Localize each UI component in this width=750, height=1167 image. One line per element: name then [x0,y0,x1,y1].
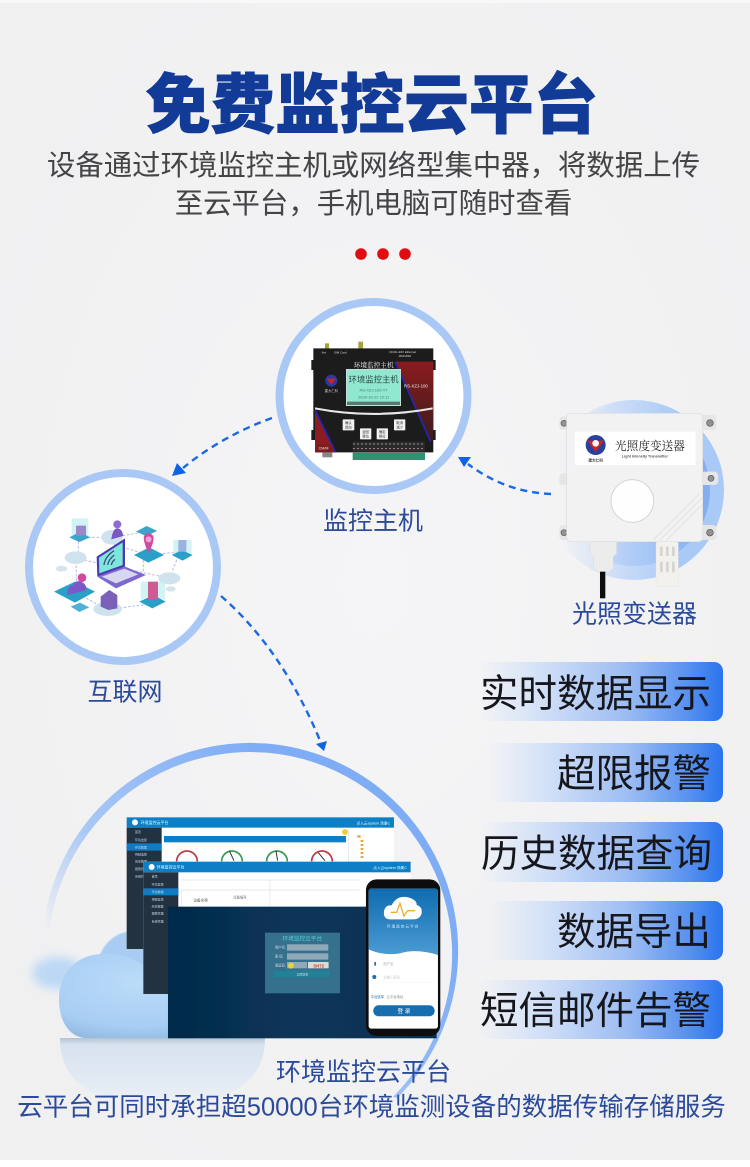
screen: data table: 系统管理 [152,918,164,923]
icon: monitoring host device: 确定 [379,429,386,434]
arrow: internet to cloud platform [221,596,327,751]
panel: internet [29,473,217,661]
panel: cloud platform illustration [32,817,440,1105]
screen: gauge dashboard: 环境监控 [135,837,147,842]
login dialog: 验证码: [275,963,286,968]
screen: login page [168,907,437,1038]
arrow: monitoring host to internet [172,418,272,476]
icon: monitoring host device [311,342,436,460]
screen: data table: 报警管理 [152,911,164,916]
subtitle text: 设备通过环境监控主机或网络型集中器，将数据上传 [47,150,700,182]
icon: light sensor device [559,413,718,598]
icon: smartphone: 云平台地址 [387,994,404,999]
icon: monitoring host device: 减少 [396,425,404,430]
screen: gauge dashboard: 系统管理 [135,874,147,879]
subtitle text: 至云平台，手机电脑可随时查看 [175,188,572,220]
feature button: real-time data display: 实时数据显示 [480,673,711,716]
cloud platform ring [43,743,458,1098]
feature button: data export: 数据导出 [557,911,711,954]
screen: data table: 点入云system 场景C [373,865,407,870]
screen: data table: 历史数据 [152,903,164,908]
login dialog: SH72 [313,963,325,968]
icon: monitoring host device: 环境监控主机 [349,375,399,385]
icon: monitoring host device: RS-XZJ-100 [404,383,428,388]
icon: smartphone: 登 录 [398,1007,411,1015]
icon: smartphone: 平台选择 [371,994,385,999]
label: light sensor: 光照变送器 [572,600,697,628]
panel: monitoring host [280,302,468,490]
screen: data table: 环境监控云平台 [157,864,185,870]
feature button: over-limit alarm [487,743,723,802]
label: internet: 互联网 [87,678,163,706]
caption: cloud platform capacity: 云平台可同时承担超50000台环境监测设备的数据传输存储服务 [17,1094,726,1122]
screen: gauge dashboard: 历史数据 [135,859,147,864]
login dialog: 立即登录 [296,971,308,976]
icon: light sensor device: Light Intensity Transmitter [622,454,669,458]
icon: monitoring host device: 返回 [362,429,370,434]
screen: data table: 首页 [152,874,158,879]
arrow: light sensor to monitoring host [458,457,551,494]
title: 免费监控云平台 [146,70,598,142]
icon: monitoring host device: 10M/100M [398,354,411,358]
screen: data table: 设备名称 [193,897,208,902]
panel: light sensor [544,400,724,598]
screen: gauge dashboard: 视频监控 [135,852,147,857]
screen: data table [143,862,411,994]
icon: monitoring host device: 建大仁科 [325,388,339,393]
label: monitoring host: 监控主机 [323,508,423,536]
login dialog [265,933,340,993]
icon: monitoring host device: SIM Card [334,350,347,354]
icon: cloud [32,931,265,1105]
icon: monitoring host device: 增加 [345,425,352,430]
icon: monitoring host device: DC10~30V Ethernet [389,350,416,354]
feature button: data export [487,901,723,960]
login dialog: 环境监控云平台 [283,935,322,943]
icon: monitoring host device: 环境监控主机 [354,360,394,369]
icon: monitoring host device: 移位 [379,434,386,439]
icon: monitoring host device: Ant [322,350,326,354]
screen: gauge dashboard: 首页 [135,829,141,834]
icon: monitoring host device: 取消 [396,420,404,425]
subtitle text [47,150,700,220]
feature button: history query: 历史数据查询 [481,833,712,876]
feature button: over-limit alarm: 超限报警 [557,753,711,796]
feature button: real-time data display [478,662,723,721]
screen: gauge dashboard: 环境监控云平台 [141,819,169,825]
feature button: history query [478,822,723,882]
icon: light sensor device: 建大仁科 [588,457,603,462]
screen: data table: 视频监控 [152,896,164,901]
icon: monitoring host device: 确认 [345,420,352,425]
login dialog: 密 码: [275,954,284,959]
icon: monitoring host device: 2020-10-22 10:11 [358,394,390,399]
icon: network laptop illustration [54,518,193,616]
screen: gauge dashboard: 点入云system 场景C [357,820,391,825]
icon: smartphone [366,879,440,1036]
icon: monitoring host device: 移位 [362,434,370,439]
screen: data table: 环境监控 [152,882,164,887]
screen: gauge dashboard: 报警管理 [135,866,147,871]
icon: light sensor device: 光照度变送器 [615,439,685,453]
icon: monitoring host device: RS-XZJ-100-YT [359,388,388,393]
screen: data table: 环境数据 [152,889,164,894]
feature button: sms email alert: 短信邮件告警 [480,990,711,1033]
login dialog: 用户名: [275,945,286,950]
label: cloud platform: 环境监控云平台 [276,1058,451,1086]
icon: monitoring host device: CM/M [319,446,328,450]
icon: smartphone: 请输入密码 [383,974,401,979]
screen: gauge dashboard [127,817,394,949]
icon: smartphone: 用户名 [383,961,393,966]
red dots [355,248,411,260]
feature button: sms email alert [478,980,723,1039]
screen: gauge dashboard: 环境数据 [135,844,147,849]
icon: smartphone: 环 境 监 控 云 平 台 [387,923,419,928]
screen: data table: 设备编号 [233,895,247,900]
